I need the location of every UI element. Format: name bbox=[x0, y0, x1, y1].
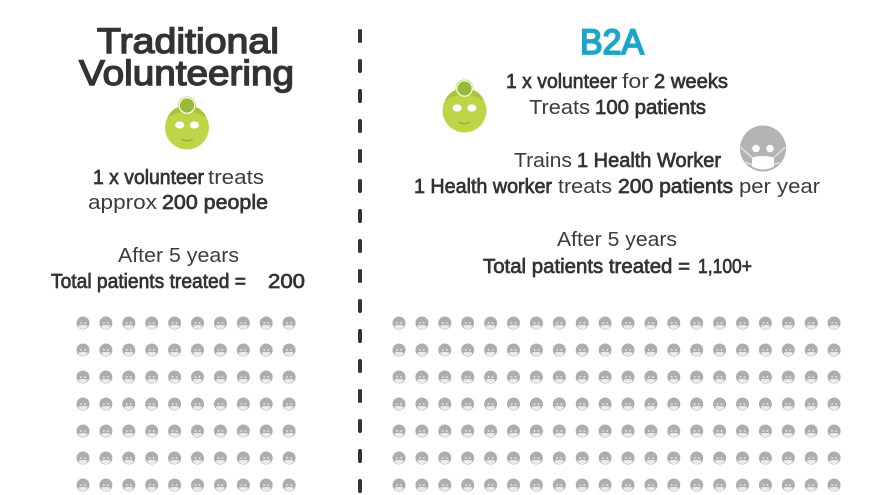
icon grid: 140 patients bbox=[392, 316, 841, 492]
panel: B2A bbox=[392, 23, 841, 492]
icon: green volunteer face bbox=[442, 80, 486, 132]
text: volunteer for 2 weeks treats 100 patients: 1 x volunteer bbox=[506, 71, 617, 93]
text: after 5 years total 1,100+: After 5 years bbox=[557, 229, 677, 251]
text: volunteer treats approx 200 people: treats bbox=[208, 167, 264, 189]
text: after 5 years total 1,100+: 1,100+ bbox=[698, 256, 752, 278]
text: trains 1 health worker: 1 Health worker bbox=[414, 176, 552, 198]
icon: grey health worker with mask bbox=[740, 126, 786, 172]
text: trains 1 health worker: per year bbox=[739, 176, 820, 198]
panel: traditional volunteering bbox=[51, 22, 305, 492]
text: volunteer for 2 weeks treats 100 patients: 100 patients bbox=[595, 97, 706, 119]
text: trains 1 health worker bbox=[414, 150, 820, 198]
title: B2A: B2A bbox=[580, 23, 645, 62]
icon grid: 70 patients bbox=[76, 316, 296, 492]
text: after 5 years total 200 bbox=[51, 245, 305, 293]
text: after 5 years total 1,100+: Total patients treated = bbox=[483, 256, 690, 278]
text: volunteer for 2 weeks treats 100 patients: Treats bbox=[529, 97, 590, 119]
text: volunteer for 2 weeks treats 100 patients bbox=[506, 71, 728, 119]
text: trains 1 health worker: 1 Health Worker bbox=[577, 150, 721, 172]
text: volunteer for 2 weeks treats 100 patients: 2 weeks bbox=[654, 71, 728, 93]
text: volunteer treats approx 200 people bbox=[88, 167, 268, 214]
icon: green volunteer face bbox=[165, 96, 209, 150]
text: volunteer for 2 weeks treats 100 patients: for bbox=[622, 71, 649, 93]
text: after 5 years total 1,100+ bbox=[483, 229, 752, 278]
text: trains 1 health worker: treats bbox=[558, 176, 612, 198]
text: after 5 years total 200: After 5 years bbox=[118, 245, 239, 267]
title: traditional volunteering: Volunteering bbox=[79, 54, 294, 93]
title: traditional volunteering bbox=[79, 22, 294, 93]
text: after 5 years total 200: 200 bbox=[268, 271, 305, 293]
text: trains 1 health worker: Trains bbox=[514, 150, 572, 172]
text: trains 1 health worker: 200 patients bbox=[618, 176, 733, 198]
text: after 5 years total 200: Total patients treated = bbox=[51, 271, 246, 293]
title: traditional volunteering: Traditional bbox=[97, 22, 279, 61]
text: volunteer treats approx 200 people: 200 people bbox=[162, 192, 268, 214]
text: volunteer treats approx 200 people: 1 x volunteer bbox=[93, 167, 204, 189]
dashed divider bbox=[358, 31, 362, 491]
text: volunteer treats approx 200 people: approx bbox=[88, 192, 157, 214]
